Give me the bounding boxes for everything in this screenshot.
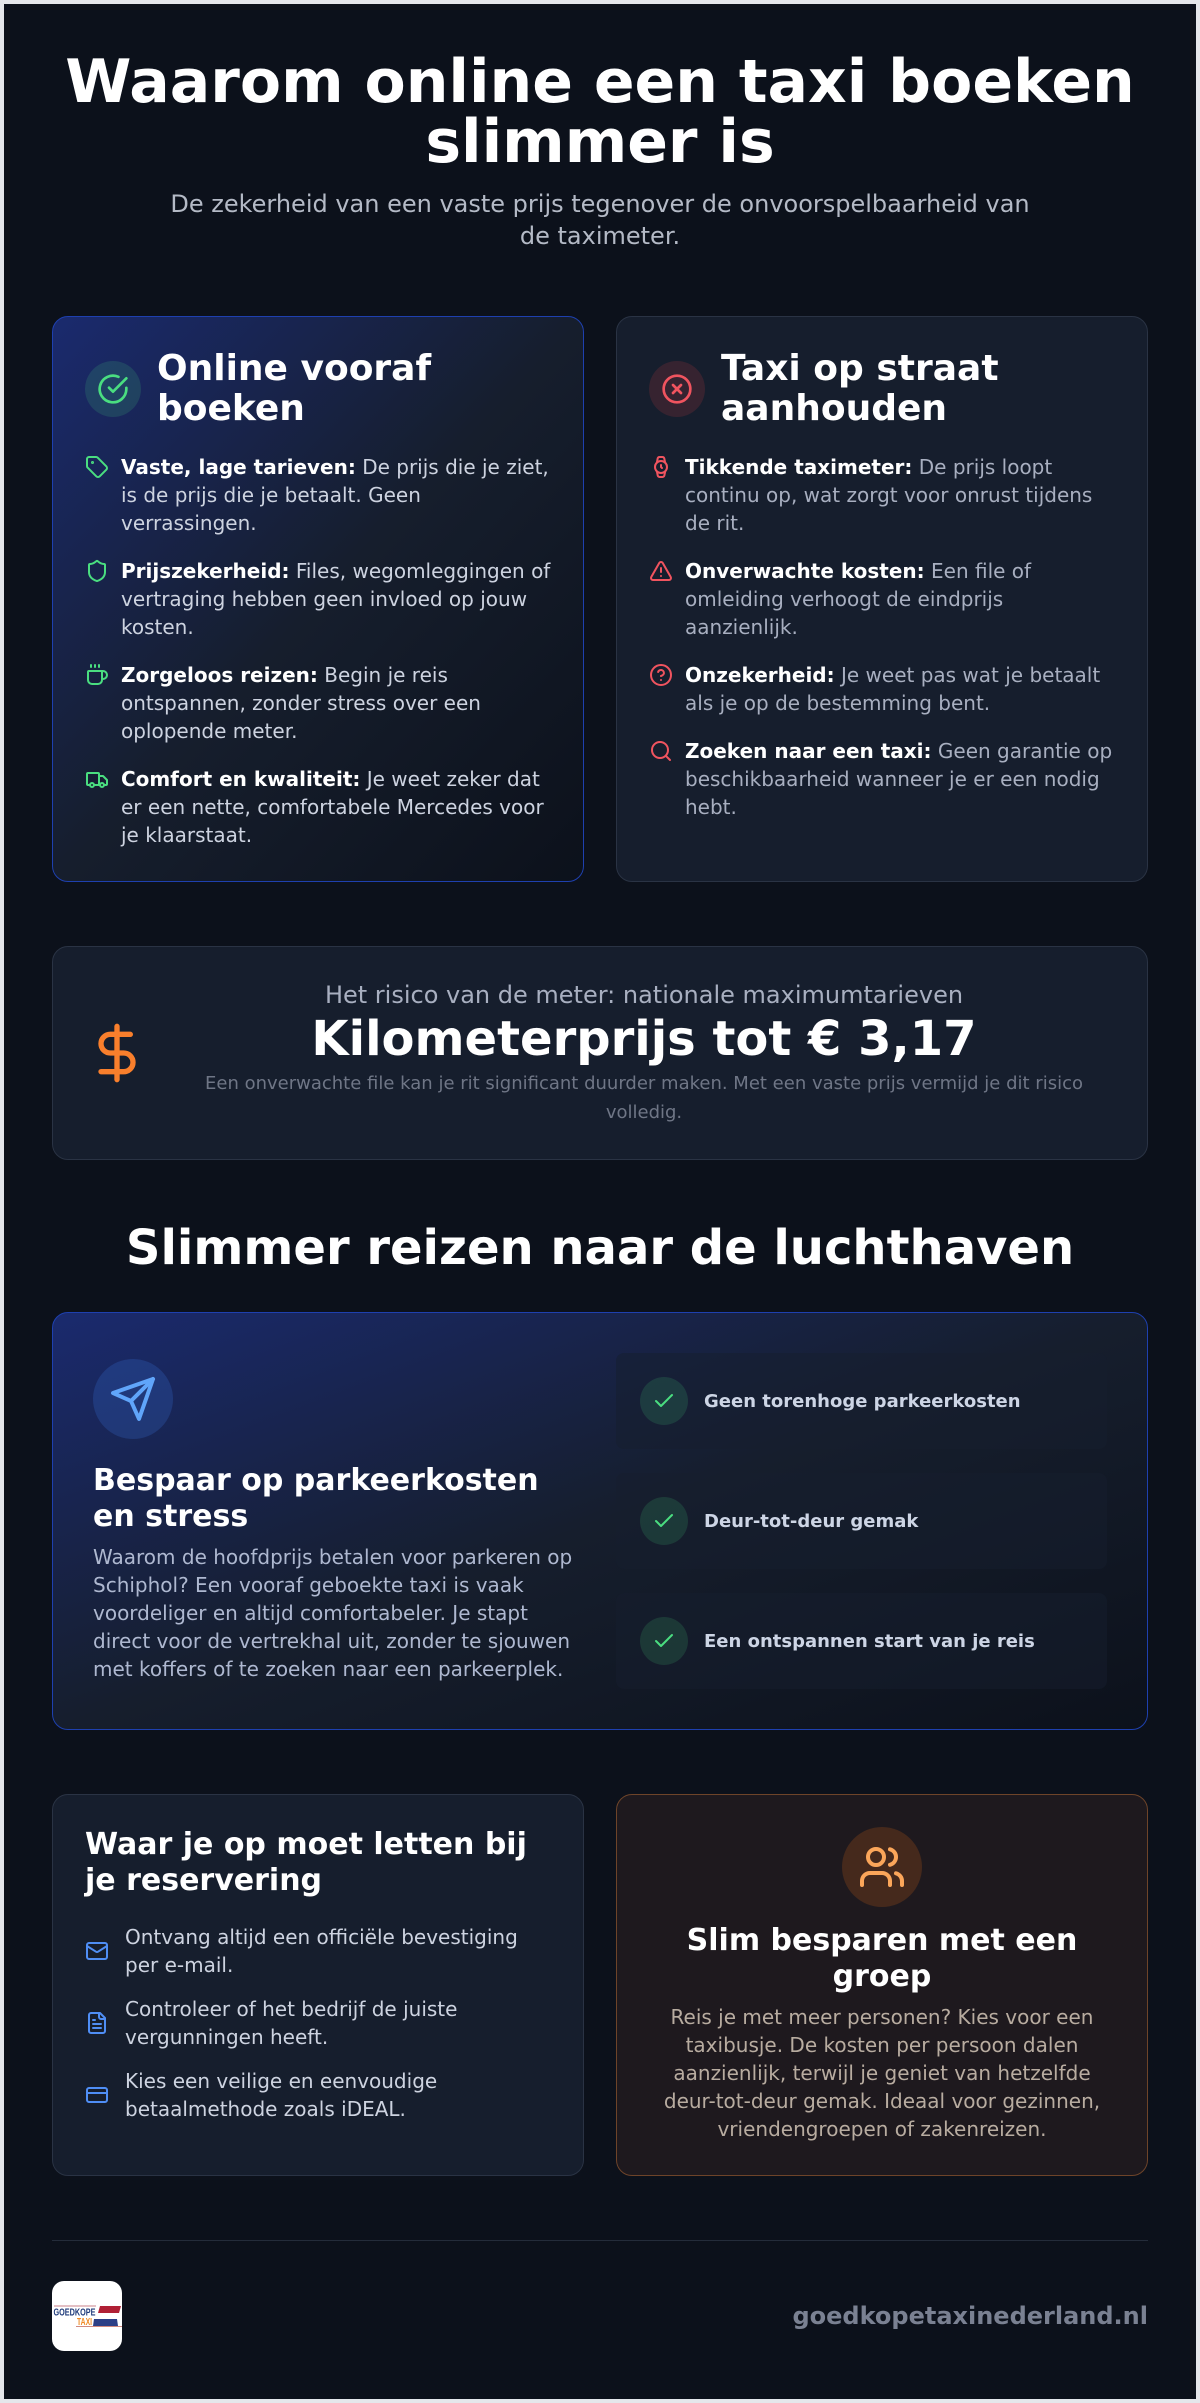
- icon: dollar sign: [98, 1024, 136, 1082]
- tips list: Kies een veilige en eenvoudige betaalmethode zoals iDEAL.: [125, 2069, 437, 2121]
- list: street taxi drawbacks: Onverwachte kosten: Een file of omleiding verhoogt de eindprijs aanzienlijk.: [685, 559, 1031, 639]
- panel: reservation tips: [52, 1794, 584, 2176]
- section heading: Slimmer reizen naar de luchthaven: [126, 1220, 1074, 1276]
- panel: taxi op straat aanhouden: [616, 316, 1148, 882]
- icon: x circle: [649, 361, 705, 417]
- tips list: [86, 1925, 518, 2121]
- title: Waarom online een taxi boeken slimmer is: [65, 47, 1135, 177]
- list: online benefits: Prijszekerheid: Files, wegomleggingen of vertraging hebben geen invloed op jouw kosten.: [121, 559, 550, 639]
- panel: risk of the meter: [52, 946, 1148, 1160]
- list: online benefits: Zorgeloos reizen: Begin je reis ontspannen, zonder stress over een oplopende meter.: [121, 663, 481, 743]
- list: online benefits: Comfort en kwaliteit: Je weet zeker dat er een nette, comfortabele Mercedes voor je klaarstaat.: [121, 767, 544, 847]
- icon: check circle: [85, 361, 141, 417]
- airport heading: Bespaar op parkeerkosten en stress: [93, 1463, 539, 1534]
- panel: online vooraf boeken: [52, 316, 584, 882]
- logo: GOEDKOPE: [54, 2308, 96, 2319]
- check item 2: [616, 1473, 1107, 1569]
- list: online benefits: Vaste, lage tarieven: De prijs die je ziet, is de prijs die je betaalt. Geen verrassingen.: [121, 455, 549, 535]
- comparison panels: [52, 316, 1148, 882]
- list: street taxi drawbacks: Tikkende taximeter: De prijs loopt continu op, wat zorgt voor onrust tijdens de rit.: [685, 455, 1092, 535]
- risk text: [205, 981, 1083, 1123]
- check item 3: [616, 1593, 1107, 1689]
- check item 1: [616, 1353, 1107, 1449]
- tips list: Ontvang altijd een officiële bevestiging per e-mail.: [125, 1925, 518, 1977]
- panel: airport: [52, 1312, 1148, 1730]
- list: online benefits: [86, 455, 551, 847]
- tips heading: Waar je op moet letten bij je reservering: [85, 1827, 527, 1898]
- subtitle: De zekerheid van een vaste prijs tegenover de onvoorspelbaarheid van de taximeter.: [170, 190, 1030, 250]
- group heading: Slim besparen met een groep: [687, 1923, 1077, 1994]
- risk label: Het risico van de meter: nationale maximumtarieven: [325, 981, 963, 1009]
- check item 3: Een ontspannen start van je reis: [704, 1631, 1035, 1652]
- header: [65, 47, 1135, 250]
- list: street taxi drawbacks: Onzekerheid: Je weet pas wat je betaalt als je op de bestemming bent.: [685, 663, 1100, 715]
- airport checklist: [616, 1353, 1035, 1665]
- list: street taxi drawbacks: [650, 455, 1112, 819]
- key figure: Kilometerprijs tot € 3,17: [311, 1011, 977, 1067]
- airport paragraph: Waarom de hoofdprijs betalen voor parkeren op Schiphol? Een vooraf geboekte taxi is vaak voordeliger en altijd comfortabeler. Je stapt direct voor de vertrekhal uit, zonder te sjouwen met koffers of te zoeken naar een parkeerplek.: [93, 1545, 572, 1681]
- group paragraph: Reis je met meer personen? Kies voor een taxibusje. De kosten per persoon dalen aanzienlijk, terwijl je geniet van hetzelfde deur-tot-deur gemak. Ideaal voor gezinnen, vriendengroepen of zakenreizen.: [664, 2005, 1100, 2141]
- bottom panels: [52, 1794, 1148, 2176]
- website: goedkopetaxinederland.nl: [792, 2302, 1148, 2330]
- logo: TAXI: [77, 2317, 92, 2328]
- icon: send: [93, 1359, 173, 1439]
- risk note: Een onverwachte file kan je rit significant duurder maken. Met een vaste prijs vermijd je dit risico volledig.: [205, 1073, 1083, 1123]
- airport text: [93, 1359, 572, 1681]
- list: street taxi drawbacks: Zoeken naar een taxi: Geen garantie op beschikbaarheid wanneer je er een nodig hebt.: [685, 739, 1112, 819]
- check item 1: Geen torenhoge parkeerkosten: [704, 1391, 1021, 1412]
- tips list: Controleer of het bedrijf de juiste vergunningen heeft.: [125, 1997, 457, 2049]
- panel heading: online: Online vooraf boeken: [157, 348, 431, 429]
- panel heading: street taxi: Taxi op straat aanhouden: [721, 348, 999, 429]
- icon: users: [842, 1827, 922, 1907]
- footer: [52, 2240, 1148, 2351]
- logo: [52, 2281, 122, 2351]
- panel: group savings: [616, 1794, 1148, 2176]
- check item 2: Deur-tot-deur gemak: [704, 1511, 918, 1532]
